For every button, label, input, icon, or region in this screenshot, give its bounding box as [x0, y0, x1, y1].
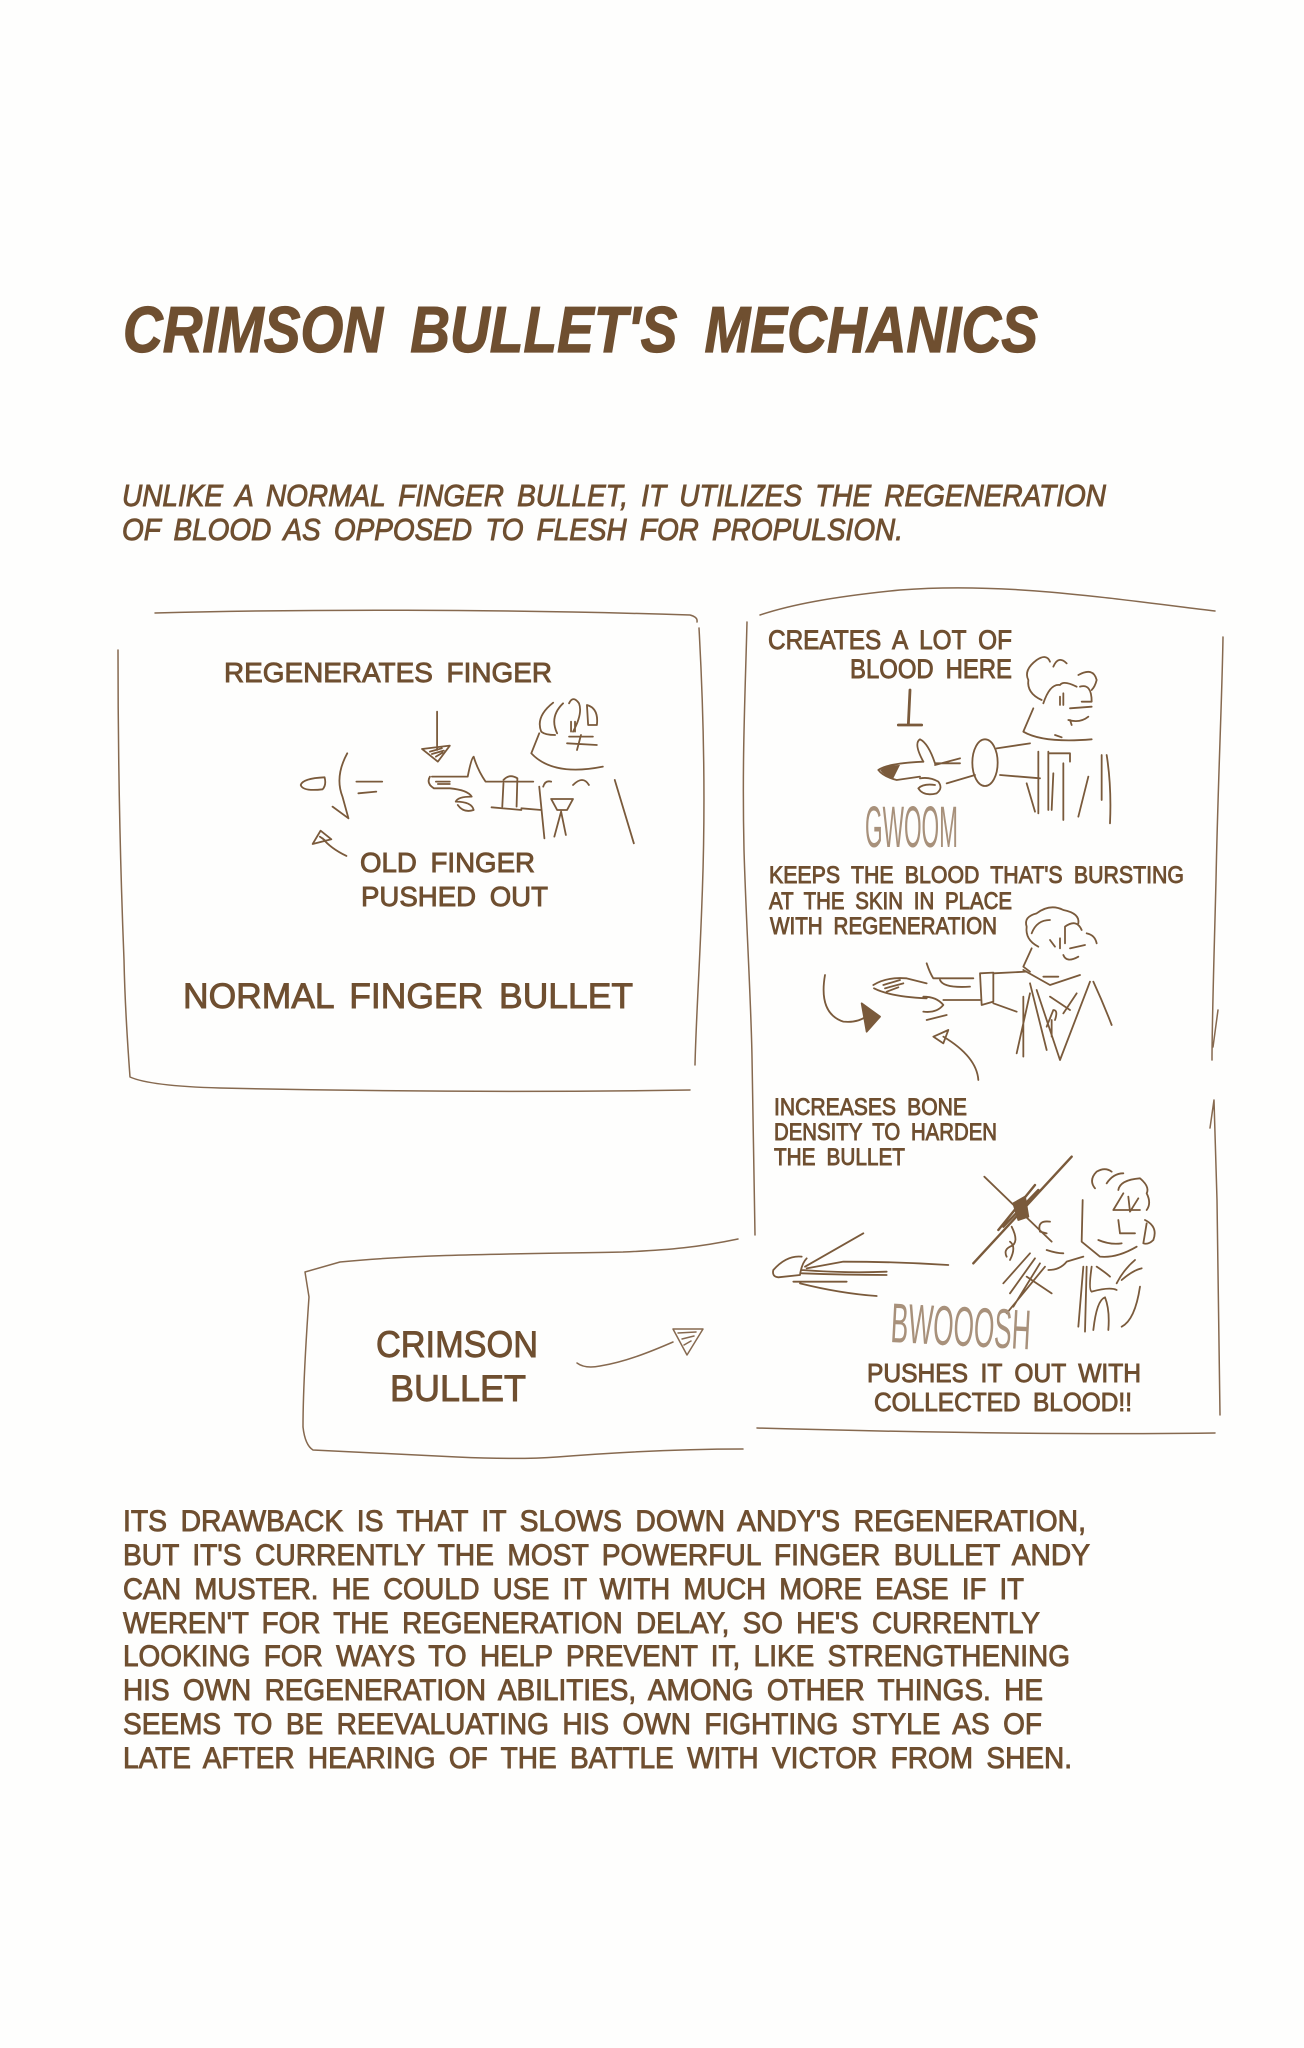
panel: crimson bullet steps: GWOOM [865, 795, 958, 860]
intro text: UNLIKE A NORMAL FINGER BULLET, IT UTILIZES THE REGENERATION [122, 478, 1107, 513]
step 3 text: INCREASES BONE [774, 1094, 967, 1121]
step 2 text: KEEPS THE BLOOD THAT'S BURSTING [769, 862, 1184, 889]
body paragraph: BUT IT'S CURRENTLY THE MOST POWERFUL FINGER BULLET ANDY [123, 1539, 1090, 1572]
body paragraph: LOOKING FOR WAYS TO HELP PREVENT IT, LIKE STRENGTHENING [123, 1640, 1070, 1673]
caption: normal finger bullet: NORMAL FINGER BULLET [183, 977, 633, 1016]
body paragraph: WEREN'T FOR THE REGENERATION DELAY, SO HE'S CURRENTLY [123, 1607, 1040, 1640]
body paragraph: CAN MUSTER. HE COULD USE IT WITH MUCH MORE EASE IF IT [123, 1573, 1024, 1606]
step 4 text: COLLECTED BLOOD!! [874, 1387, 1132, 1417]
label: old finger pushed out: PUSHED OUT [361, 881, 548, 912]
step 2 text: AT THE SKIN IN PLACE [769, 888, 1012, 915]
intro text [122, 478, 1107, 547]
label: regenerates finger: REGENERATES FINGER [224, 657, 552, 688]
sketch: firing the crimson bullet [773, 1157, 1155, 1332]
caption: crimson bullet [376, 1324, 538, 1409]
step 1 text [768, 625, 1012, 684]
step 3 text [774, 1094, 997, 1171]
step 4 text: PUSHES IT OUT WITH [867, 1358, 1141, 1388]
body paragraph [123, 1505, 1090, 1775]
panel: crimson bullet caption [303, 1239, 743, 1458]
title: CRIMSON BULLET'S MECHANICS [123, 293, 1038, 366]
step 1 text: CREATES A LOT OF [768, 625, 1012, 655]
step 1 text: BLOOD HERE [850, 654, 1012, 684]
label: old finger pushed out [360, 847, 548, 912]
body paragraph: LATE AFTER HEARING OF THE BATTLE WITH VICTOR FROM SHEN. [123, 1742, 1072, 1775]
step 4 text [867, 1358, 1141, 1417]
body paragraph: SEEMS TO BE REEVALUATING HIS OWN FIGHTING STYLE AS OF [123, 1708, 1042, 1741]
step 2 text: WITH REGENERATION [770, 913, 997, 940]
panel: normal finger bullet [118, 610, 704, 1091]
sketch: holding blood in place [824, 907, 1112, 1080]
panel: crimson bullet steps [743, 588, 1223, 1434]
panel: crimson bullet steps: BWOOOSH [889, 1291, 1032, 1361]
step 2 text [769, 862, 1184, 940]
arrow to the final step [577, 1329, 703, 1367]
caption: crimson bullet: BULLET [390, 1368, 526, 1409]
label: old finger pushed out: OLD FINGER [360, 847, 535, 878]
panel border [303, 1239, 743, 1458]
sketch: creating blood in the finger [878, 657, 1110, 823]
step 3 text: THE BULLET [774, 1144, 905, 1171]
caption: crimson bullet: CRIMSON [376, 1324, 538, 1365]
body paragraph: ITS DRAWBACK IS THAT IT SLOWS DOWN ANDY'S REGENERATION, [123, 1505, 1086, 1538]
panel border [118, 610, 704, 1091]
panel border [743, 588, 1223, 1434]
step 3 text: DENSITY TO HARDEN [774, 1119, 997, 1146]
intro text: OF BLOOD AS OPPOSED TO FLESH FOR PROPULSION. [122, 512, 903, 547]
sketch: Andy firing a normal finger bullet [301, 699, 634, 856]
body paragraph: HIS OWN REGENERATION ABILITIES, AMONG OTHER THINGS. HE [123, 1674, 1043, 1707]
